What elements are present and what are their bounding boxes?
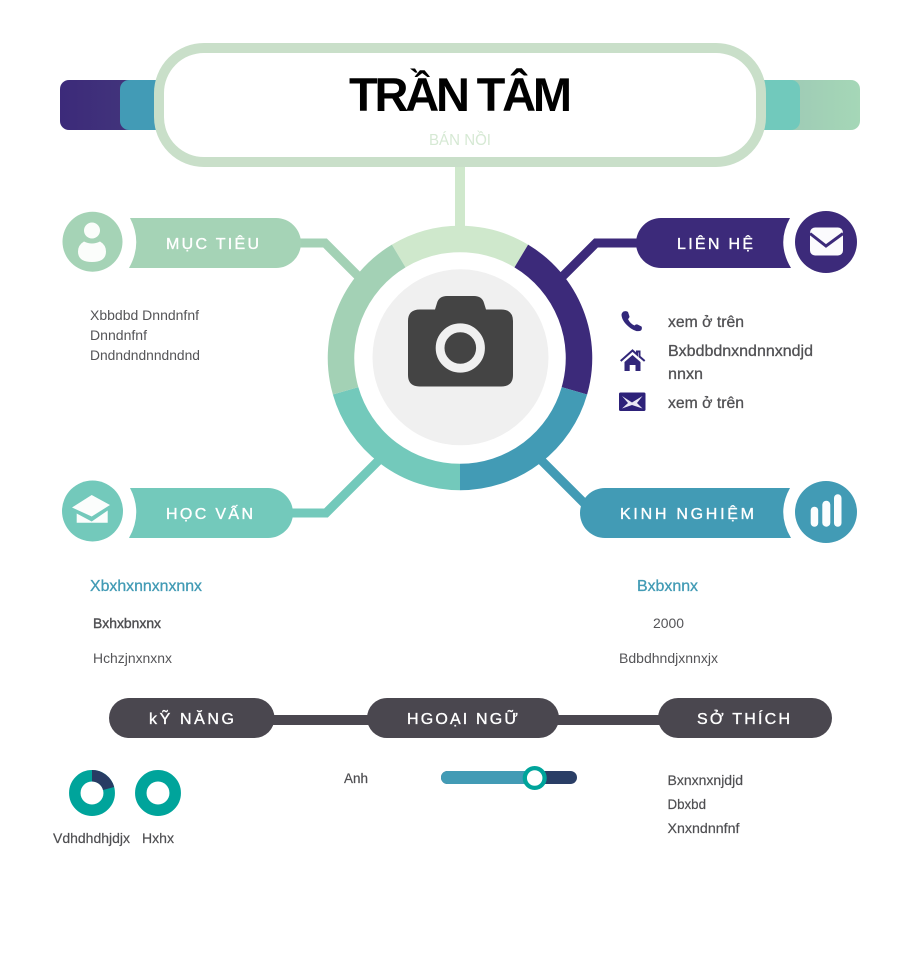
section: lien he: LIÊN HỆ bbox=[677, 234, 753, 253]
section: muc tieu bbox=[62, 212, 301, 272]
icon: home bbox=[621, 350, 645, 371]
connector: header to ring bbox=[455, 160, 465, 230]
section: kinh nghiem bbox=[580, 481, 857, 543]
header box bbox=[159, 48, 761, 162]
section: muc tieu: MỤC TIÊU bbox=[166, 234, 259, 253]
text: kinh nghiem: 2000 bbox=[653, 615, 684, 631]
language label: Anh bbox=[344, 770, 368, 786]
hobbies list: Xnxndnnfnf bbox=[668, 820, 740, 836]
text: kinh nghiem bbox=[619, 578, 718, 666]
icon: phone bbox=[622, 311, 642, 331]
photo placeholder bbox=[372, 269, 548, 445]
icon: envelope bbox=[619, 392, 646, 411]
connector: kinh nghiem bbox=[538, 457, 590, 509]
icon: bars bbox=[795, 481, 857, 543]
hobbies list bbox=[668, 772, 743, 836]
text: hoc van bbox=[90, 578, 202, 666]
decorative bars behind header bbox=[60, 80, 860, 130]
connector: lien he bbox=[558, 243, 640, 281]
contact list: Bxbdbdnxndnnxndjd bbox=[668, 343, 813, 360]
icon: camera bbox=[408, 296, 513, 386]
slider knob bbox=[525, 768, 545, 788]
chart: skill donut 2 bbox=[141, 776, 175, 810]
chart: skill donut 1 bbox=[75, 776, 109, 810]
pill bbox=[580, 488, 791, 538]
central ring bbox=[341, 239, 579, 477]
pill bbox=[129, 218, 301, 268]
hobbies list: Dbxbd bbox=[668, 796, 706, 812]
heading: so thich: SỞ THÍCH bbox=[697, 709, 790, 728]
text: muc tieu bbox=[90, 307, 200, 363]
text: muc tieu: Dnndnfnf bbox=[90, 327, 147, 343]
text: hoc van: Hchzjnxnxnx bbox=[93, 650, 172, 666]
skill labels bbox=[53, 830, 174, 846]
heading: ky nang bbox=[109, 698, 274, 738]
text: hoc van: Xbxhxnnxnxnnx bbox=[90, 578, 202, 595]
pill bbox=[129, 488, 293, 538]
section: kinh nghiem: KINH NGHIỆM bbox=[620, 504, 754, 523]
section: hoc van bbox=[62, 480, 293, 542]
text: muc tieu: Dndndndnndndnd bbox=[90, 347, 200, 363]
text: kinh nghiem: Bdbdhndjxnnxjx bbox=[619, 650, 718, 666]
connector: bottom headers bbox=[260, 715, 680, 725]
text: muc tieu: Xbbdbd Dnndnfnf bbox=[90, 307, 199, 323]
text: kinh nghiem: Bxbxnnx bbox=[637, 578, 698, 595]
skill labels: Hxhx bbox=[142, 830, 174, 846]
connector: muc tieu bbox=[298, 243, 362, 280]
text: hoc van: Bxhxbnxnx bbox=[93, 615, 161, 631]
connector: hoc van bbox=[290, 457, 382, 513]
section: lien he bbox=[636, 211, 857, 273]
icon: graduation cap bbox=[62, 480, 123, 542]
icon: person bbox=[62, 212, 122, 272]
contact list bbox=[619, 311, 813, 412]
section: hoc van: HỌC VẤN bbox=[166, 504, 253, 523]
hobbies list: Bxnxnxnjdjd bbox=[668, 772, 743, 788]
subtitle: BÁN NỒI bbox=[429, 130, 491, 149]
contact list: nnxn bbox=[668, 366, 703, 383]
heading: ngoai ngu bbox=[367, 698, 559, 738]
heading: ky nang: kỸ NĂNG bbox=[149, 708, 234, 728]
language slider bbox=[441, 768, 577, 788]
pill bbox=[636, 218, 791, 268]
contact list: xem ở trên bbox=[668, 395, 744, 412]
skill labels: Vdhdhdhjdjx bbox=[53, 830, 130, 846]
contact list: xem ở trên bbox=[668, 314, 744, 331]
heading: so thich bbox=[658, 698, 832, 738]
icon: mail bbox=[795, 211, 857, 273]
title: TRẦN TÂM bbox=[349, 68, 572, 121]
heading: ngoai ngu: HGOẠI NGỮ bbox=[407, 708, 518, 728]
